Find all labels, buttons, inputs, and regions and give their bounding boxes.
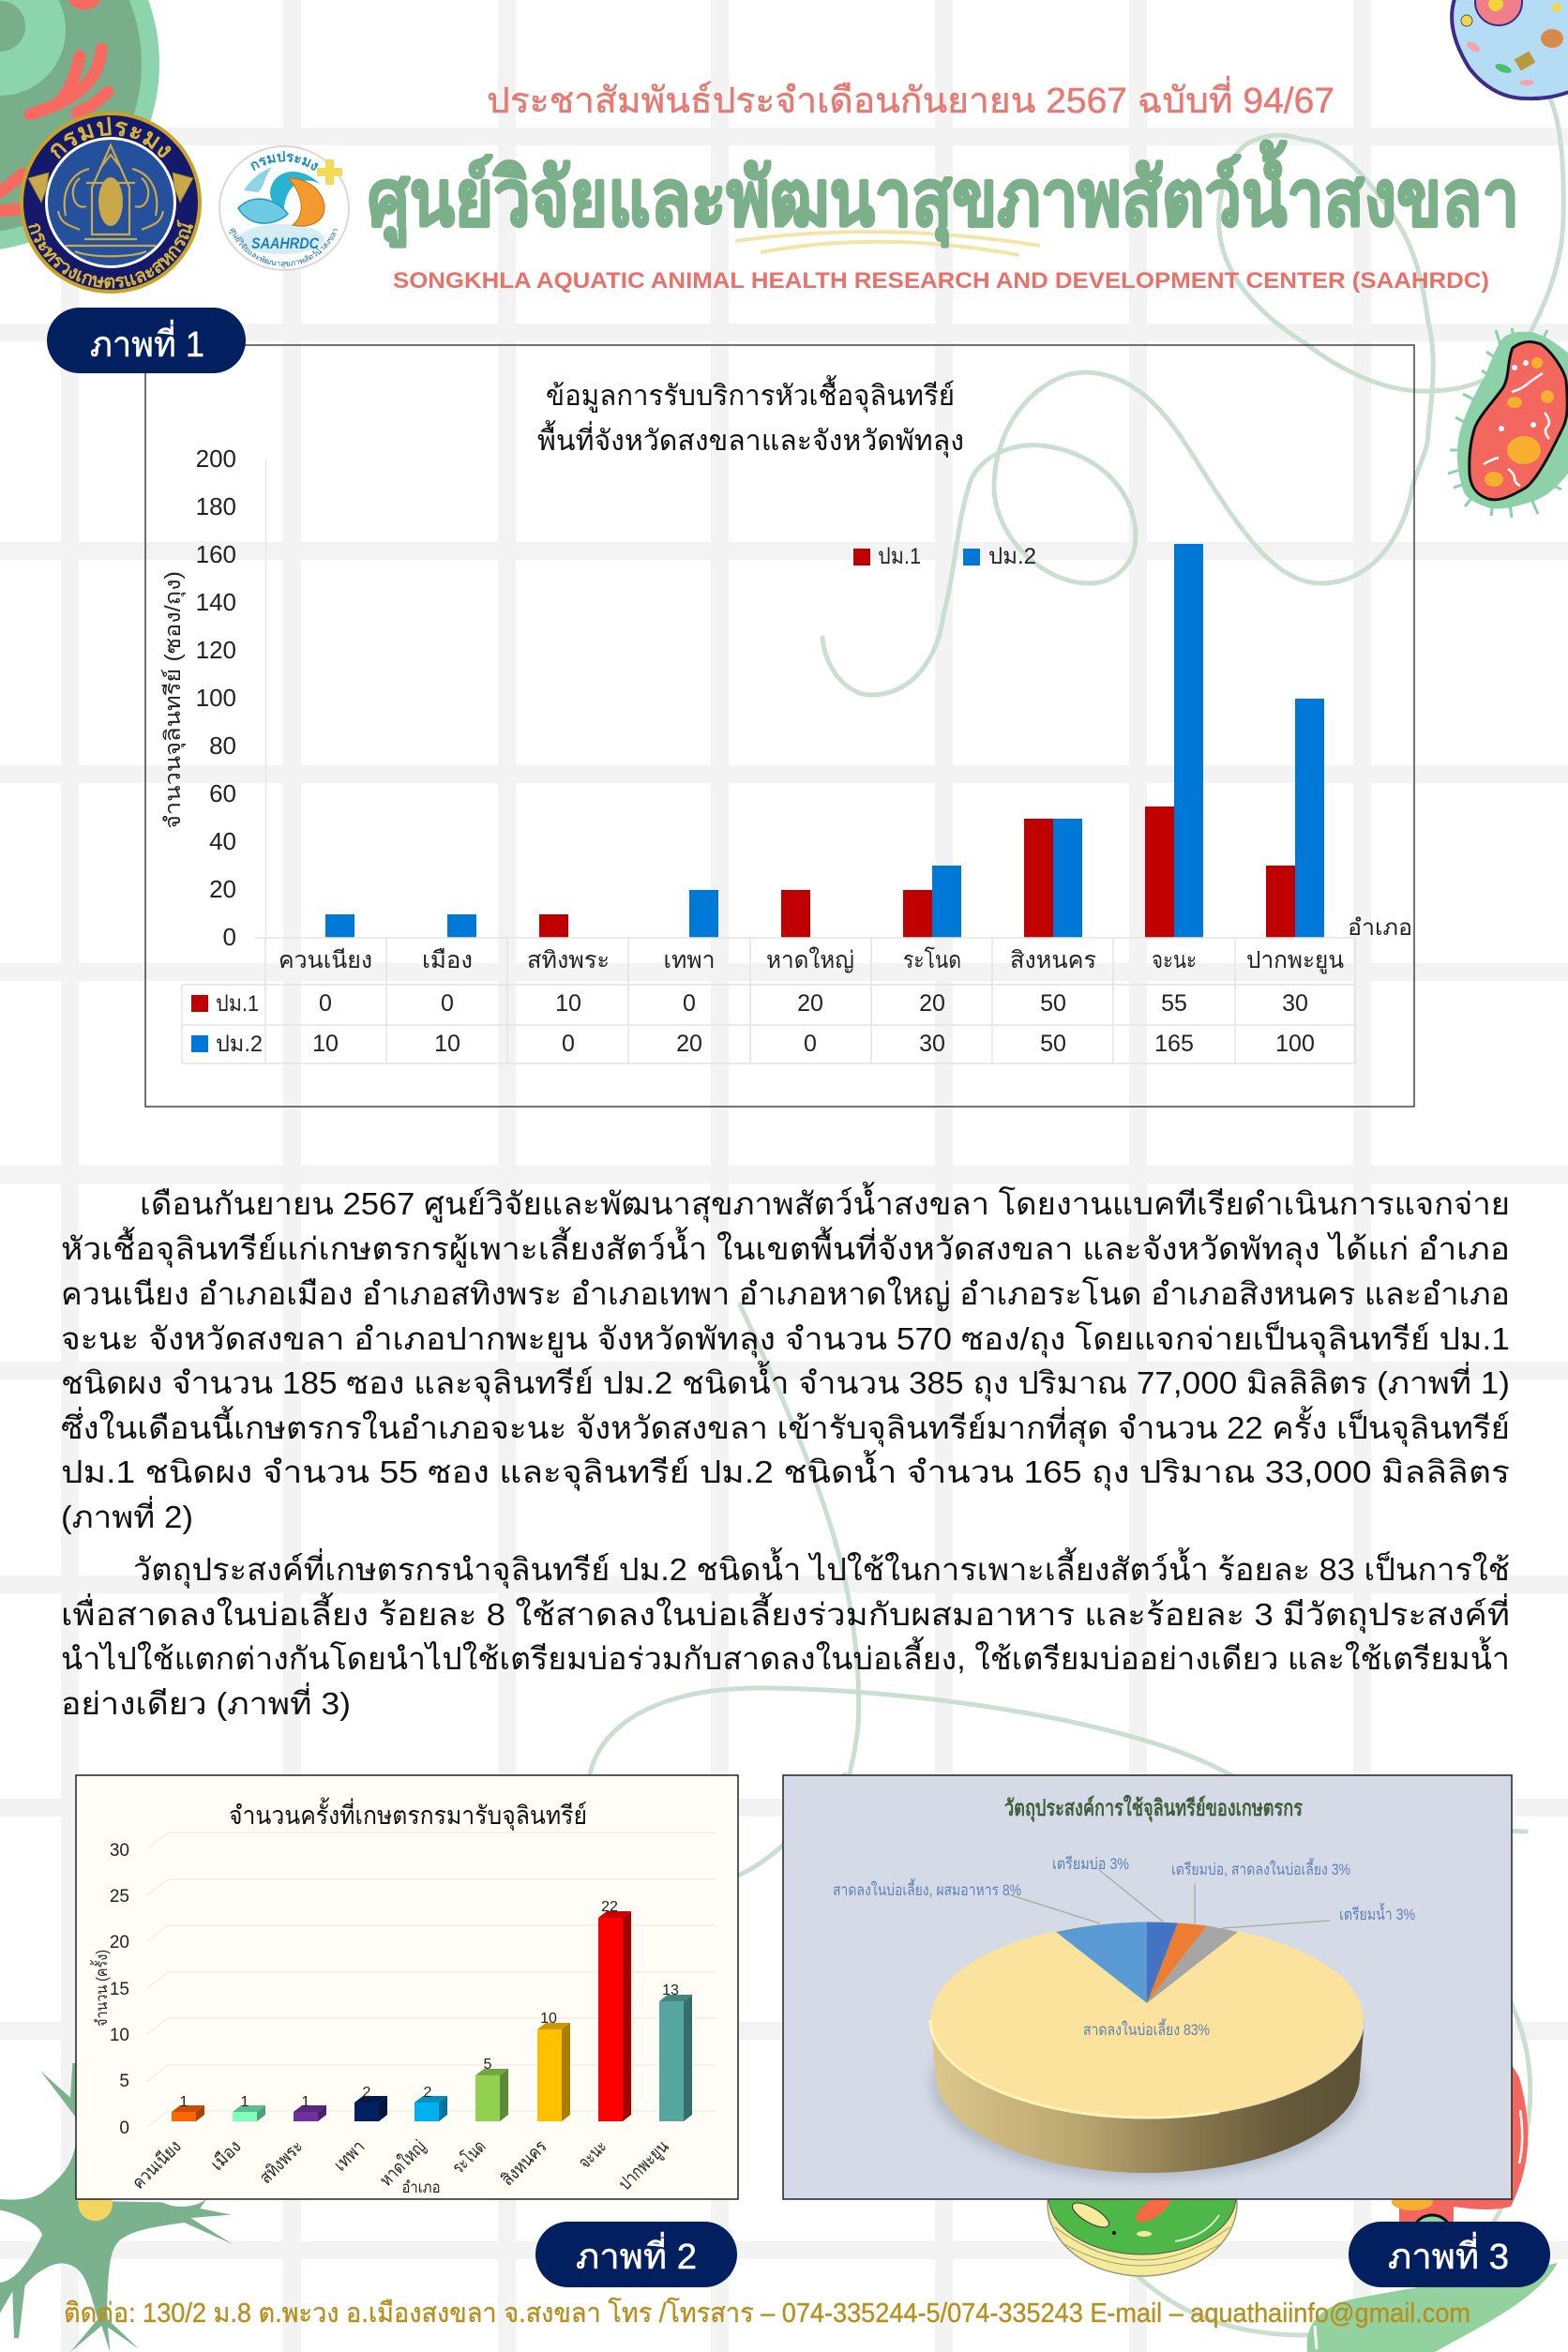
chart 1 data table: 10 <box>434 1031 460 1057</box>
body text: paragraph 2 <box>61 1547 1510 1721</box>
pie labels: สาดลงในบ่อเลี้ยง, ผสมอาหาร 8% <box>833 1878 1021 1899</box>
chart 2 data labels: 13 <box>662 1983 679 1998</box>
chart 2 data labels <box>180 1899 679 2110</box>
chart 1 legend: ปม.1 <box>878 544 921 569</box>
chart 1 legend: ปม.2 <box>988 544 1036 569</box>
chart 1 data table: 55 <box>1161 990 1187 1017</box>
chart 1 data table: เทพา <box>664 947 715 973</box>
chart 1 data table: ระโนด <box>903 946 961 973</box>
chart 2 y axis: 10 <box>110 2026 129 2045</box>
chart 2 category labels: ปากพะยูน <box>615 2137 673 2194</box>
chart 2 y axis: 15 <box>110 1980 129 1999</box>
chart 2 y axis <box>110 1841 129 2138</box>
chart 1 data table: 0 <box>683 990 696 1017</box>
chart 1 data table: 100 <box>1275 1031 1315 1057</box>
chart 2 category labels: จะนะ <box>575 2137 611 2173</box>
chart 1 data table: ควนเนียง <box>279 947 372 973</box>
SAAHRDC logo: กรมประมง <box>251 150 319 171</box>
badge: figure 3 <box>1349 2222 1550 2287</box>
panel: figure 2 chart <box>76 1775 738 2199</box>
chart 2 category labels: หาดใหญ่ <box>376 2136 430 2191</box>
SAAHRDC logo: SAAHRDC <box>251 234 320 252</box>
badge: figure 3: ภาพที่ 3 <box>1388 2232 1509 2277</box>
chart 2 data labels: 10 <box>540 2011 557 2027</box>
chart 1 y axis: 200 <box>196 445 236 473</box>
chart 2 category labels: สทิงพระ <box>256 2137 308 2188</box>
chart 1 title: ข้อมูลการรับบริการหัวเชื้อจุลินทรีย์ <box>546 375 955 414</box>
chart 1 y axis: 140 <box>196 588 236 616</box>
department seal logo: กระทรวงเกษตรและสหกรณ์ <box>28 219 193 289</box>
chart 1 data table: 30 <box>1282 990 1308 1017</box>
chart 2 category labels: ควนเนียง <box>128 2136 186 2194</box>
body text: paragraph 1: ซึ่งในเดือนนี้เกษตรกรในอำเภอจะนะ จังหวัดสงขลา เข้ารับจุลินทรีย์มากที่สุด จำนวน 22 ครั้ง เป็นจุลินทรีย์ <box>61 1406 1510 1447</box>
chart 2 y axis: 0 <box>119 2118 129 2138</box>
chart 2 data labels: 5 <box>484 2057 492 2073</box>
chart 2 data labels: 1 <box>302 2094 310 2110</box>
decoration: top-left green cell <box>0 0 159 251</box>
chart 2 data labels: 2 <box>424 2085 432 2101</box>
panel: figure 1 chart <box>145 345 1414 1107</box>
body text: paragraph 1: หัวเชื้อจุลินทรีย์แก่เกษตรกรผู้เพาะเลี้ยงสัตว์น้ำ ในเขตพื้นที่จังหวัดสงขลา และจังหวัดพัทลุง ได้แก่ อำเภอ <box>61 1227 1510 1268</box>
body text: paragraph 1: เดือนกันยายน 2567 ศูนย์วิจัยและพัฒนาสุขภาพสัตว์น้ำสงขลา โดยงานแบคทีเรียดำเนินการแจกจ่าย <box>140 1182 1510 1223</box>
chart 2 x axis title: อำเภอ <box>401 2179 441 2196</box>
chart 1 data table: สิงหนคร <box>1010 947 1096 973</box>
chart 1 data table: 30 <box>919 1031 945 1057</box>
header: issue line: ประชาสัมพันธ์ประจำเดือนกันยายน 2567 ฉบับที่ 94/67 <box>487 76 1334 121</box>
badge: figure 2: ภาพที่ 2 <box>576 2232 697 2277</box>
chart 1 bars <box>265 460 1324 938</box>
decoration: bottom-center bowl <box>1048 2132 1237 2276</box>
chart 2 bars <box>172 1911 692 2121</box>
chart 2 y axis: 25 <box>110 1887 129 1907</box>
3D pie <box>930 1922 1364 2173</box>
chart 2 title: จำนวนครั้งที่เกษตรกรมารับจุลินทรีย์ <box>229 1797 587 1832</box>
body text: paragraph 1: ควนเนียง อำเภอเมือง อำเภอสทิงพระ อำเภอเทพา อำเภอหาดใหญ่ อำเภอระโนด อำเภอสิงหนคร และอำเภอ <box>61 1276 1510 1311</box>
chart 1 data table: 0 <box>562 1031 575 1057</box>
pie shadow <box>931 1988 1363 2179</box>
chart 1 y axis: 80 <box>209 731 236 760</box>
body text: paragraph 2: เพื่อสาดลงในบ่อเลี้ยง ร้อยละ 8 ใช้สาดลงในบ่อเลี้ยงร่วมกับผสมอาหาร และร้อยละ 3 มีวัตถุประสงค์ที่ <box>61 1592 1510 1634</box>
body text: paragraph 1: (ภาพที่ 2) <box>61 1496 193 1534</box>
chart 1 y axis: 20 <box>209 875 236 903</box>
pie labels: สาดลงในบ่อเลี้ยง 83% <box>1083 2018 1210 2039</box>
chart 1 data table: ปากพะยูน <box>1246 947 1344 974</box>
decoration: top-right blue cell <box>1452 0 1568 98</box>
body text: paragraph 2: อย่างเดียว (ภาพที่ 3) <box>61 1682 351 1721</box>
chart 1 y axis: 100 <box>196 684 236 712</box>
chart 2 y axis: 30 <box>110 1841 129 1861</box>
chart 2 category labels <box>128 2135 673 2194</box>
chart 2 y axis: 20 <box>110 1933 129 1952</box>
chart 1 x unit label: อำเภอ <box>1348 915 1412 941</box>
chart 1 data table: 50 <box>1040 1031 1066 1057</box>
footer contact line: ติดต่อ: 130/2 ม.8 ต.พะวง อ.เมืองสงขลา จ.สงขลา โทร /โทรสาร – 074-335244-5/074-335243 E-mail – aquathaiinfo@gmail.com <box>64 2297 1470 2329</box>
chart 1 data table: 20 <box>797 990 823 1017</box>
badge: figure 1: ภาพที่ 1 <box>90 320 204 365</box>
chart 1 y axis <box>196 445 236 951</box>
body text: paragraph 1: จะนะ จังหวัดสงขลา อำเภอปากพะยูน จังหวัดพัทลุง จำนวน 570 ซอง/ถุง โดยแจกจ่ายเป็นจุลินทรีย์ ปม.1 <box>61 1320 1510 1358</box>
decoration: right bacterium <box>1448 328 1568 518</box>
decoration: bottom-right leaf <box>1307 2263 1558 2352</box>
SAAHRDC logo: ศูนย์วิจัยและพัฒนาสุขภาพสัตว์น้ำสงขลา <box>229 229 338 268</box>
chart 2 y axis: 5 <box>119 2072 129 2091</box>
chart 1 title <box>537 375 964 459</box>
chart 1 data table: 165 <box>1154 1031 1194 1057</box>
panel: figure 3 pie chart <box>783 1775 1512 2199</box>
body text: paragraph 1: ปม.1 ชนิดผง จำนวน 55 ซอง และจุลินทรีย์ ปม.2 ชนิดน้ำ จำนวน 165 ถุง ปริมาณ 33,000 มิลลิลิตร <box>61 1450 1510 1491</box>
chart 1 data table: 0 <box>319 990 332 1017</box>
chart 1 title: พื้นที่จังหวัดสงขลาและจังหวัดพัทลุง <box>537 420 964 459</box>
chart 2 data labels: 1 <box>241 2094 249 2110</box>
chart 1 data table: ปม.2 <box>216 1032 263 1057</box>
SAAHRDC logo <box>219 145 350 271</box>
chart 1 data table: 0 <box>804 1031 817 1057</box>
chart 1 data table: 50 <box>1040 990 1066 1017</box>
chart 2 data labels: 22 <box>601 1899 618 1915</box>
chart 1 y axis title: จำนวนจุลินทรีย์ (ซอง/ถุง) <box>160 571 186 829</box>
chart 1 data table: หาดใหญ่ <box>766 946 854 973</box>
title underline swoosh <box>735 232 1040 255</box>
chart 1 y axis: 60 <box>209 779 236 807</box>
chart 1 data table: 0 <box>441 990 454 1017</box>
chart 2 category labels: สิงหนคร <box>498 2137 551 2190</box>
chart 1 y axis: 160 <box>196 540 236 568</box>
pie labels <box>833 1855 1415 2039</box>
department seal logo: กรมประมง <box>51 116 171 159</box>
chart 1 y axis: 180 <box>196 492 236 520</box>
chart 1 data table: 10 <box>312 1031 339 1057</box>
header: english subtitle: SONGKHLA AQUATIC ANIMAL HEALTH RESEARCH AND DEVELOPMENT CENTER (SAAHRDC) <box>393 268 1489 294</box>
decoration: right coral shape <box>1392 2058 1528 2249</box>
chart 2 grid <box>147 1832 716 2127</box>
chart 1 data table: 20 <box>676 1031 702 1057</box>
chart 1 data table: สทิงพระ <box>527 947 610 973</box>
decoration: bottom-left neuron <box>0 2063 233 2352</box>
pie labels: เตรียมบ่อ 3% <box>1052 1855 1129 1873</box>
chart 1 data table: 10 <box>555 990 581 1017</box>
decorative squiggle lines <box>590 97 1563 2335</box>
body text: paragraph 2: วัตถุประสงค์ที่เกษตรกรนำจุลินทรีย์ ปม.2 ชนิดน้ำ ไปใช้ในการเพาะเลี้ยงสัตว์น้ำ ร้อยละ 83 เป็นการใช้ <box>133 1547 1510 1589</box>
chart 1 y axis: 0 <box>223 923 236 951</box>
chart 1 y axis: 40 <box>209 827 236 855</box>
chart 3 title: วัตถุประสงค์การใช้จุลินทรีย์ของเกษตรกร <box>1004 1794 1303 1823</box>
pie leader lines <box>1008 1869 1330 1928</box>
pie labels: เตรียมน้ำ 3% <box>1339 1903 1415 1923</box>
chart 1 data table: 20 <box>919 990 945 1017</box>
badge: figure 2 <box>535 2222 737 2287</box>
chart 2 category labels: เมือง <box>207 2137 246 2175</box>
chart 2 data labels: 1 <box>180 2094 188 2110</box>
chart 1 y axis: 120 <box>196 636 236 664</box>
body text: paragraph 1: ชนิดผง จำนวน 185 ซอง และจุลินทรีย์ ปม.2 ชนิดน้ำ จำนวน 385 ถุง ปริมาณ 77,000 มิลลิลิตร (ภาพที่ 1) <box>61 1361 1510 1402</box>
body text: paragraph 2: นำไปใช้แตกต่างกันโดยนำไปใช้เตรียมบ่อร่วมกับสาดลงในบ่อเลี้ยง, ใช้เตรียมบ่ออย่างเดียว และใช้เตรียมน้ำ <box>61 1636 1510 1676</box>
chart 2 data labels: 2 <box>363 2085 371 2101</box>
chart 1 legend <box>853 544 1036 569</box>
chart 2 category labels: ระโนด <box>447 2135 490 2179</box>
chart 2 y axis title: จำนวน (ครั้ง) <box>90 1950 111 2027</box>
department seal logo <box>20 112 202 294</box>
chart 1 data table <box>182 938 1355 1063</box>
pie labels: เตรียมบ่อ, สาดลงในบ่อเลี้ยง 3% <box>1171 1858 1350 1878</box>
chart 1 data table: เมือง <box>422 947 473 973</box>
chart 1 data table: ปม.1 <box>216 991 259 1017</box>
badge: figure 1 <box>47 308 246 373</box>
body text: paragraph 1 <box>61 1182 1510 1534</box>
chart 2 category labels: เทพา <box>331 2137 369 2176</box>
chart 1 data table: จะนะ <box>1152 947 1197 973</box>
